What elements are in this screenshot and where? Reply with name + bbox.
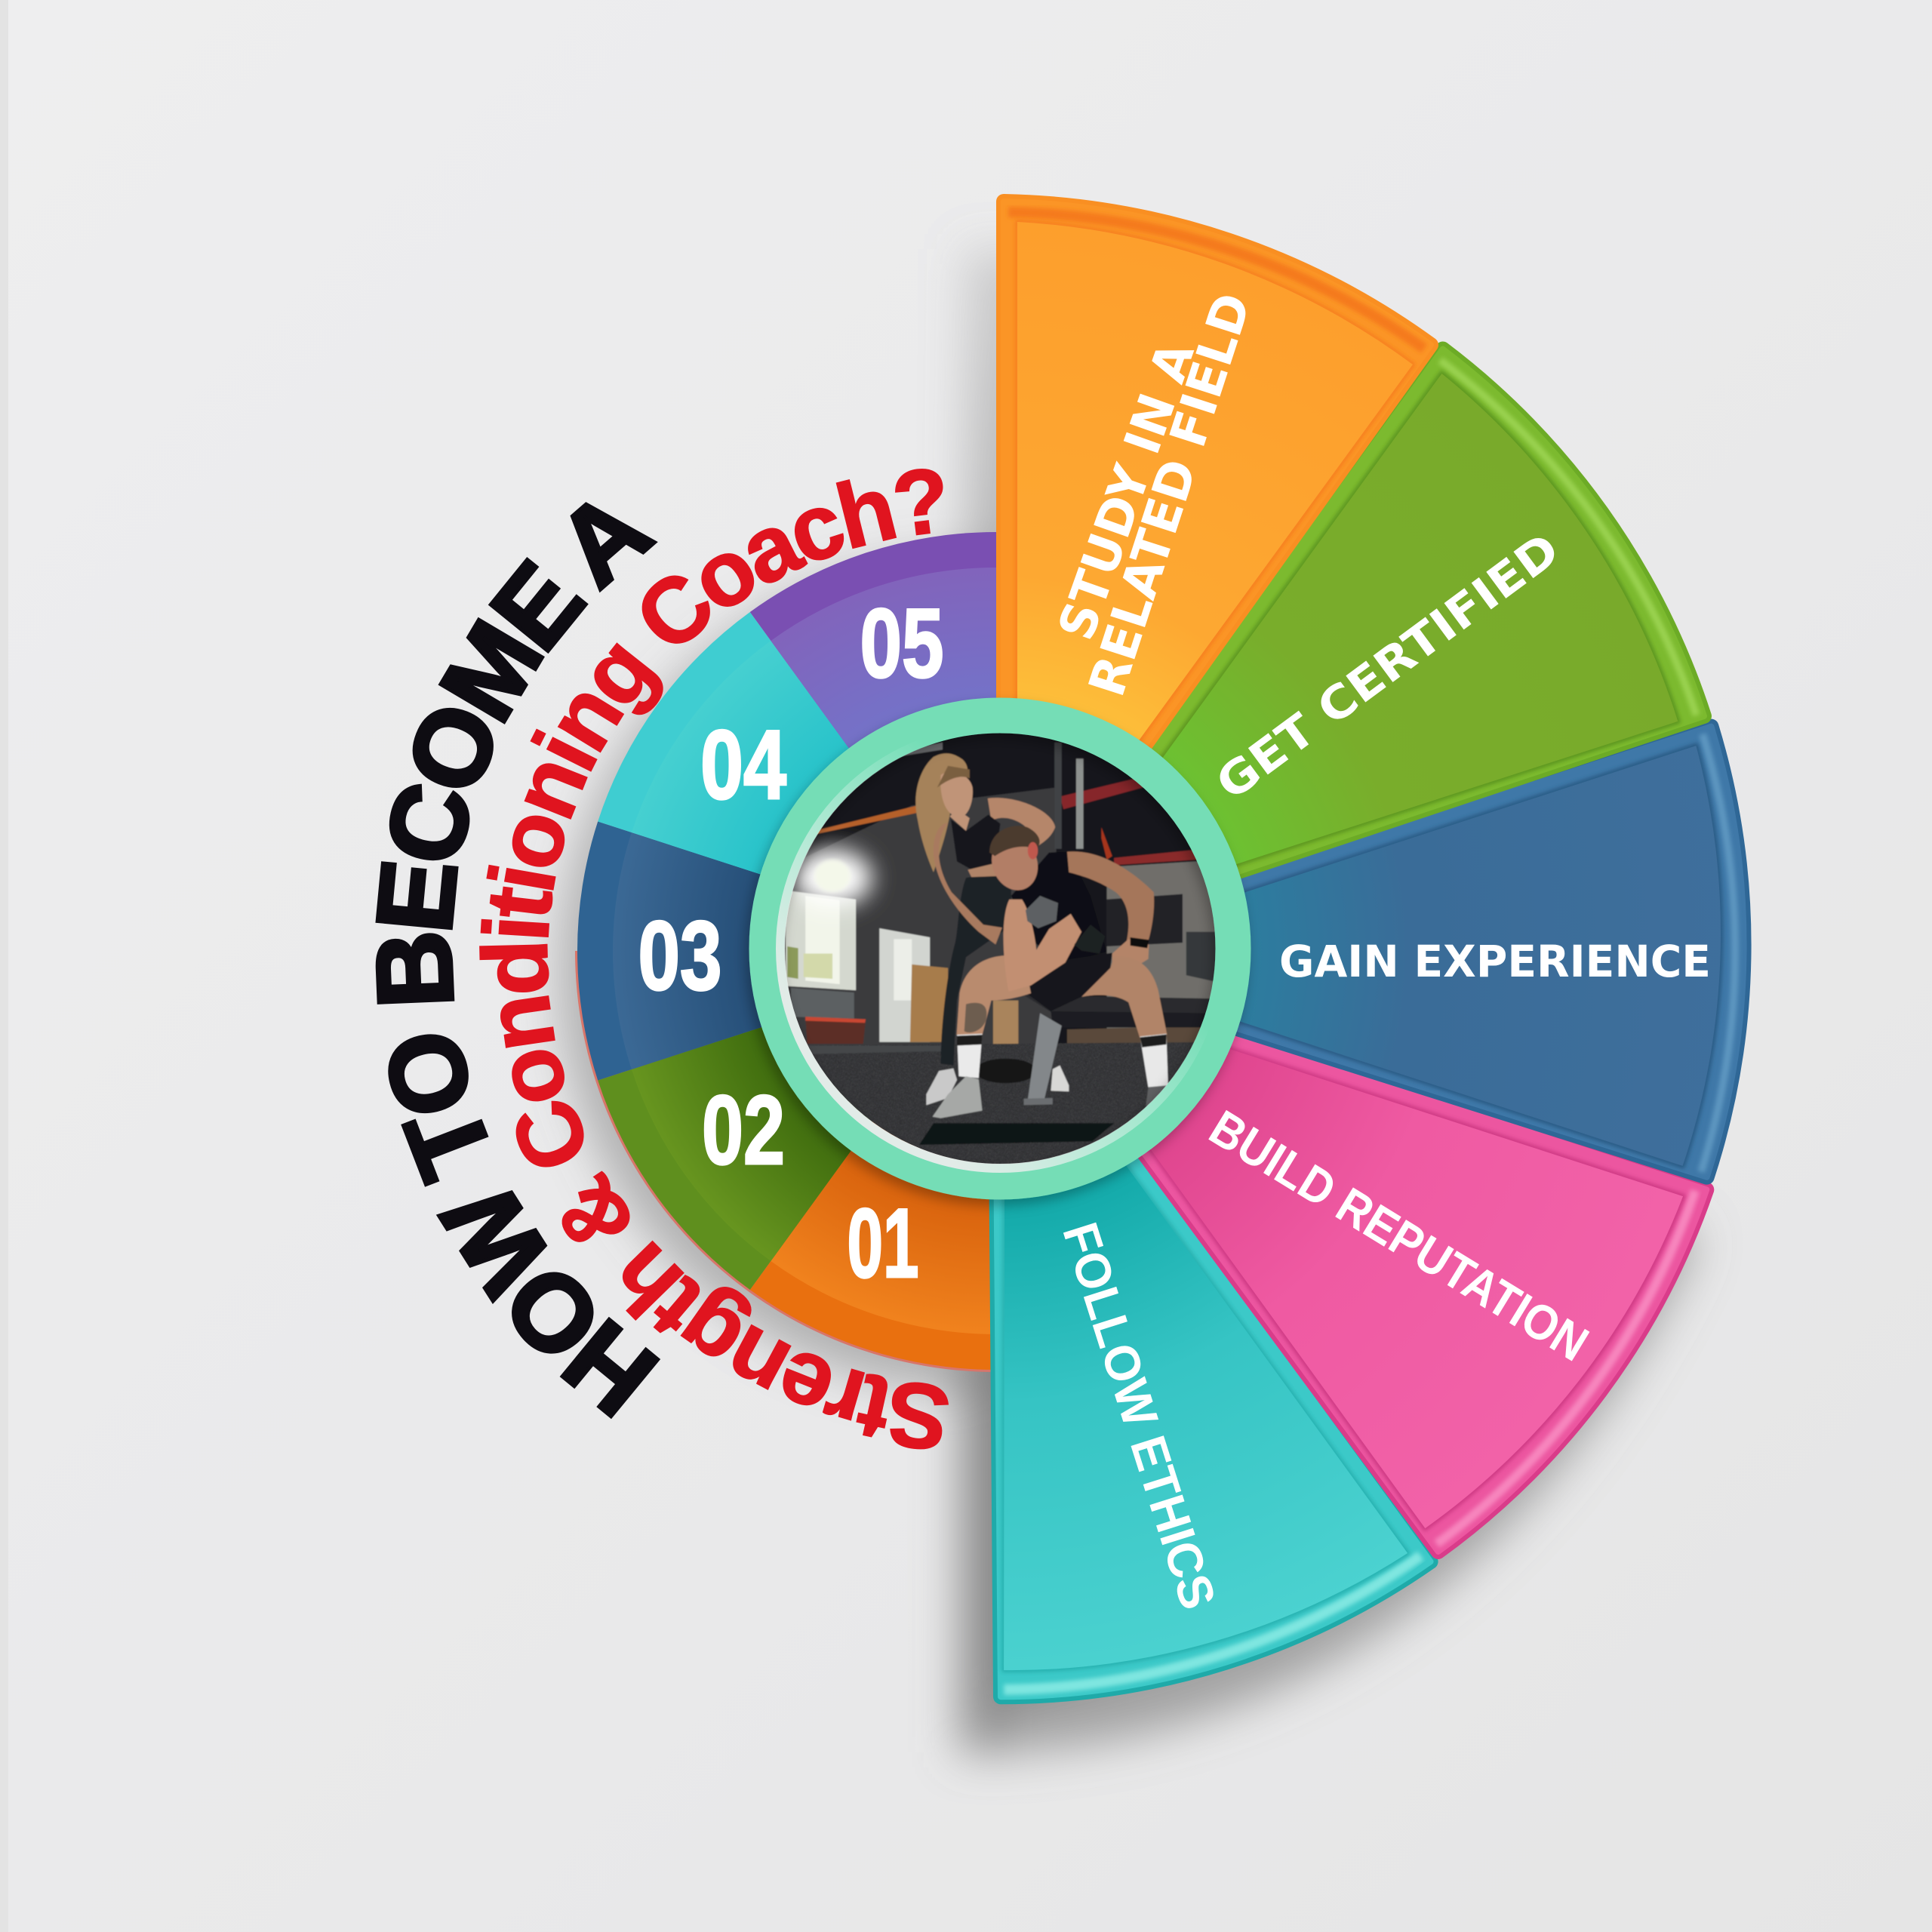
- tray: build reputation pink: [1036, 1015, 1706, 1596]
- center photo of coach and athlete: [785, 734, 1215, 1164]
- tray: study orange: [1004, 202, 1431, 768]
- bench: [1024, 995, 1215, 1013]
- infographic canvas: [375, 194, 1752, 1784]
- man far arm: [1067, 851, 1154, 951]
- segment 05 purple: [750, 467, 1195, 951]
- label: study in a related field: STUDY IN A: [1047, 334, 1205, 648]
- label: gain experience: GAIN EXPERIENCE: [1279, 936, 1711, 987]
- wheel shadow: [558, 249, 1698, 1752]
- man arm with dumbbell: [1004, 900, 1081, 992]
- number 02: 02: [702, 1075, 785, 1185]
- man torso: [1011, 852, 1107, 964]
- numbers: [638, 588, 943, 1298]
- label: study in a related field line 2: RELATED FIELD: [1078, 286, 1263, 703]
- title: how to become a: HOW TO BECOME A: [375, 502, 661, 1419]
- floor: [813, 1041, 1194, 1164]
- subtitle: strength and conditioning coach: Strength & Conditioning Coach?: [479, 469, 949, 1449]
- segment 02 green: [551, 806, 996, 1290]
- racks: [1060, 777, 1143, 809]
- number 05: 05: [860, 588, 943, 698]
- woman shoe: [926, 1069, 957, 1105]
- label: follow ethics: FOLLOW ETHICS: [1052, 1216, 1227, 1616]
- man shoes: [933, 1076, 983, 1118]
- woman: [941, 875, 1011, 1066]
- man head: [984, 830, 1045, 897]
- segment 04 teal: [598, 587, 1072, 951]
- disc edge: [575, 951, 996, 1372]
- step labels: [1047, 286, 1711, 1616]
- man shorts: [1024, 953, 1112, 1011]
- number 03: 03: [638, 900, 721, 1011]
- number 04: 04: [700, 709, 786, 820]
- tray: get certified green: [1110, 349, 1789, 1058]
- gym backdrop: [785, 734, 1197, 1044]
- segment 03 blue: [521, 717, 996, 1081]
- tray: gain experience blue: [1173, 727, 1843, 1308]
- mint ring around photo: [767, 715, 1233, 1182]
- light glow: [792, 849, 872, 906]
- segment 01 orange: [750, 951, 996, 1370]
- man socks: [957, 1034, 983, 1078]
- tray: follow ethics teal: [752, 1103, 1431, 1813]
- label: build reputation: BUILD REPUTATION: [1201, 1099, 1598, 1372]
- label: get certified: GET CERTIFIED: [1207, 523, 1569, 811]
- man legs: [957, 955, 1031, 1035]
- number 01: 01: [847, 1188, 919, 1298]
- outer tray segments: [752, 202, 1843, 1813]
- inner disc with numbered segments: [521, 467, 1195, 1372]
- weight plate: [980, 1058, 1032, 1084]
